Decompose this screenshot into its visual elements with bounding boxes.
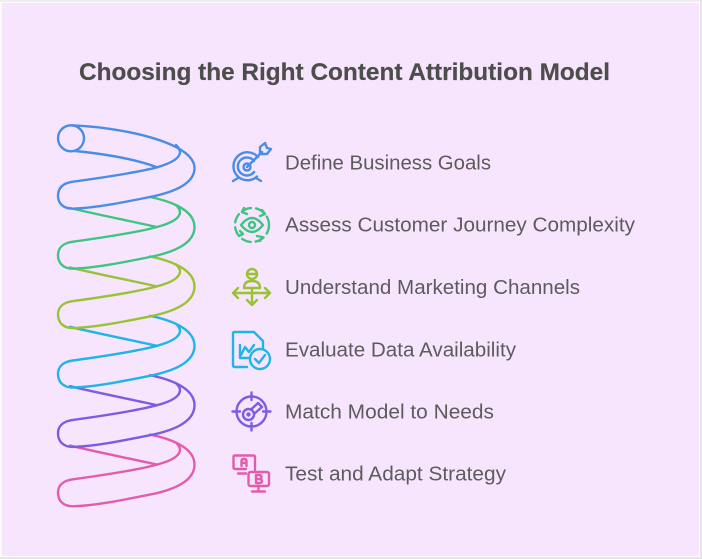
list item: Match Model to Needs [232,392,494,430]
spiral coil: lime [58,256,194,328]
label: Assess Customer Journey Complexity [285,214,635,236]
icon: target with arrow [233,143,271,181]
spiral coil: cyan [58,316,194,388]
spiral chart [58,125,194,506]
spiral coil: purple [58,375,194,447]
label: Define Business Goals [285,152,491,174]
list item: Define Business Goals [233,143,491,181]
title: Choosing the Right Content Attribution Model [79,59,610,86]
spiral coil: pink [58,435,194,506]
list item: Evaluate Data Availability [233,332,516,369]
spiral coil: blue [58,125,194,209]
label: Evaluate Data Availability [285,340,516,362]
icon: document with chart and check [233,332,270,369]
label: Test and Adapt Strategy [285,464,506,486]
icon: eye with circular arrows [235,208,269,242]
icon: key in crosshair [232,392,270,430]
icon: A/B test screens [234,456,269,492]
list item: Test and Adapt Strategy [234,456,506,492]
spiral coil: green [58,197,194,269]
label: Match Model to Needs [285,402,494,424]
icon: person with direction arrows [233,269,270,305]
list item: Assess Customer Journey Complexity [235,208,635,242]
list item: Understand Marketing Channels [233,269,580,305]
label: Understand Marketing Channels [285,277,580,299]
